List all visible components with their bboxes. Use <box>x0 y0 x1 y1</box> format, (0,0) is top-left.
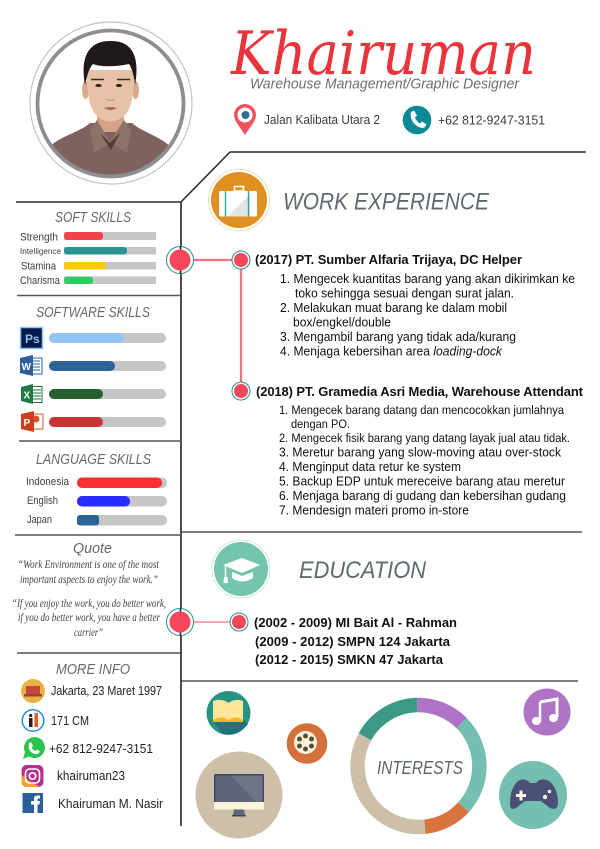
phone number: +62 812-9247-3151 <box>438 114 545 128</box>
icon: graduation cap <box>212 540 270 598</box>
job: 2018: 2. Mengecek fisik barang yang datang layak jual atau tidak. <box>279 431 570 445</box>
job: 2017: 1. Mengecek kuantitas barang yang akan dikirimkan ke <box>280 272 575 286</box>
skill: charisma: Charisma <box>20 275 61 287</box>
job: 2018: 1. Mengecek barang datang dan mencocokkan jumlahnya <box>279 403 564 417</box>
skill: powerpoint <box>21 411 166 432</box>
timeline connector <box>166 246 250 400</box>
job: 2018: 5. Backup EDP untuk mereceive barang atau meretur <box>279 474 565 488</box>
job: 2017 <box>255 252 575 358</box>
info: instagram: khairuman23 <box>57 769 125 783</box>
education list: (2012 - 2015) SMKN 47 Jakarta <box>255 652 444 667</box>
icon: game controller <box>499 761 567 829</box>
heading: software skills: SOFTWARE SKILLS <box>36 304 150 321</box>
info: facebook: Khairuman M. Nasir <box>58 797 163 811</box>
icon: briefcase <box>208 170 270 230</box>
address: Jalan Kalibata Utara 2 <box>264 113 380 127</box>
skill: word <box>20 355 166 376</box>
language: indonesia <box>26 476 167 488</box>
language: english <box>27 495 167 507</box>
quote text: “Work Environment is one of the most <box>18 559 160 571</box>
icon: music note <box>524 688 570 736</box>
skill: excel <box>21 384 166 404</box>
education list: (2009 - 2012) SMPN 124 Jakarta <box>255 634 451 649</box>
icon: location pin <box>234 104 256 135</box>
info: height: 171 CM <box>51 714 89 728</box>
panel: soft skills <box>20 209 156 287</box>
heading: education: EDUCATION <box>299 557 427 584</box>
job: 2017: 3. Mengambil barang yang tidak ada/kurang <box>280 330 516 344</box>
skill: word: W <box>22 362 32 373</box>
skill: strength: Strength <box>20 232 58 244</box>
job: 2017: toko sehingga sesuai dengan surat jalan. <box>295 286 514 300</box>
job: 2017: box/engkel/double <box>293 316 391 330</box>
language: japan: Japan <box>27 514 52 526</box>
panel: more info <box>21 661 163 813</box>
interests label: INTERESTS <box>377 758 463 778</box>
info: birth: Jakarta, 23 Maret 1997 <box>51 684 162 698</box>
job: 2018: 3. Meretur barang yang slow-moving atau over-stock <box>279 446 562 460</box>
skill: excel: X <box>24 390 30 402</box>
education list <box>254 615 457 667</box>
panel: education <box>166 540 457 667</box>
panel: interests <box>196 688 570 838</box>
job: 2017: 4. Menjaga kebersihan area loading-dock <box>280 344 503 358</box>
language: japan <box>27 514 167 526</box>
heading: more info: MORE INFO <box>56 661 130 678</box>
name title: Khairuman <box>230 19 536 89</box>
quote text: carrier” <box>74 627 103 639</box>
panel: language skills <box>26 451 167 526</box>
job: 2018: 6. Menjaga barang di gudang dan kebersihan gudang <box>279 489 566 503</box>
info: whatsapp <box>23 737 153 759</box>
donut chart <box>358 705 479 827</box>
icon: phone <box>403 106 431 134</box>
quote text: if you do better work, you have a better <box>18 612 160 624</box>
job: 2018: 7. Mendesign materi promo in-store <box>279 504 469 518</box>
profile photo <box>30 22 192 185</box>
quote text <box>12 559 166 639</box>
job: 2017: 2. Melakukan muat barang ke dalam mobil <box>280 301 507 315</box>
education list: (2002 - 2009) MI Bait Al - Rahman <box>254 615 457 630</box>
job: 2018: dengan PO. <box>291 417 350 431</box>
heading: soft skills: SOFT SKILLS <box>55 209 131 226</box>
panel: quote <box>12 540 166 639</box>
info: birth <box>21 679 162 703</box>
skill: stamina: Stamina <box>21 260 57 272</box>
panel: software skills <box>20 304 166 432</box>
job: 2018: (2018) PT. Gramedia Asri Media, Warehouse Attendant <box>256 384 584 399</box>
job subtitle: Warehouse Management/Graphic Designer <box>250 76 520 92</box>
quote text: “If you enjoy the work, you do better work, <box>12 598 166 610</box>
education connector <box>166 608 248 636</box>
icon: computer monitor <box>196 752 282 838</box>
info: height <box>22 710 89 731</box>
language: indonesia: Indonesia <box>26 476 70 488</box>
job: 2018: 4. Menginput data retur ke system <box>279 460 461 474</box>
job: 2018 <box>256 384 584 518</box>
info: whatsapp: +62 812-9247-3151 <box>49 742 153 756</box>
panel: work experience <box>166 170 584 518</box>
heading: quote: Quote <box>73 540 112 557</box>
info: facebook <box>22 793 163 813</box>
heading: work experience: WORK EXPERIENCE <box>283 188 490 216</box>
skill: intelligence: Intelligence <box>20 246 61 256</box>
skill: photoshop: Ps <box>25 332 40 346</box>
heading: language skills: LANGUAGE SKILLS <box>36 451 151 468</box>
skill: powerpoint: P <box>24 418 30 429</box>
icon: film reel <box>287 723 327 764</box>
icon: book <box>206 691 250 735</box>
language: english: English <box>27 495 58 507</box>
skill: photoshop <box>20 328 166 348</box>
job: 2017: (2017) PT. Sumber Alfaria Trijaya, DC Helper <box>255 252 522 267</box>
quote text: important aspects to enjoy the work.” <box>20 574 158 586</box>
info: instagram <box>22 765 125 787</box>
